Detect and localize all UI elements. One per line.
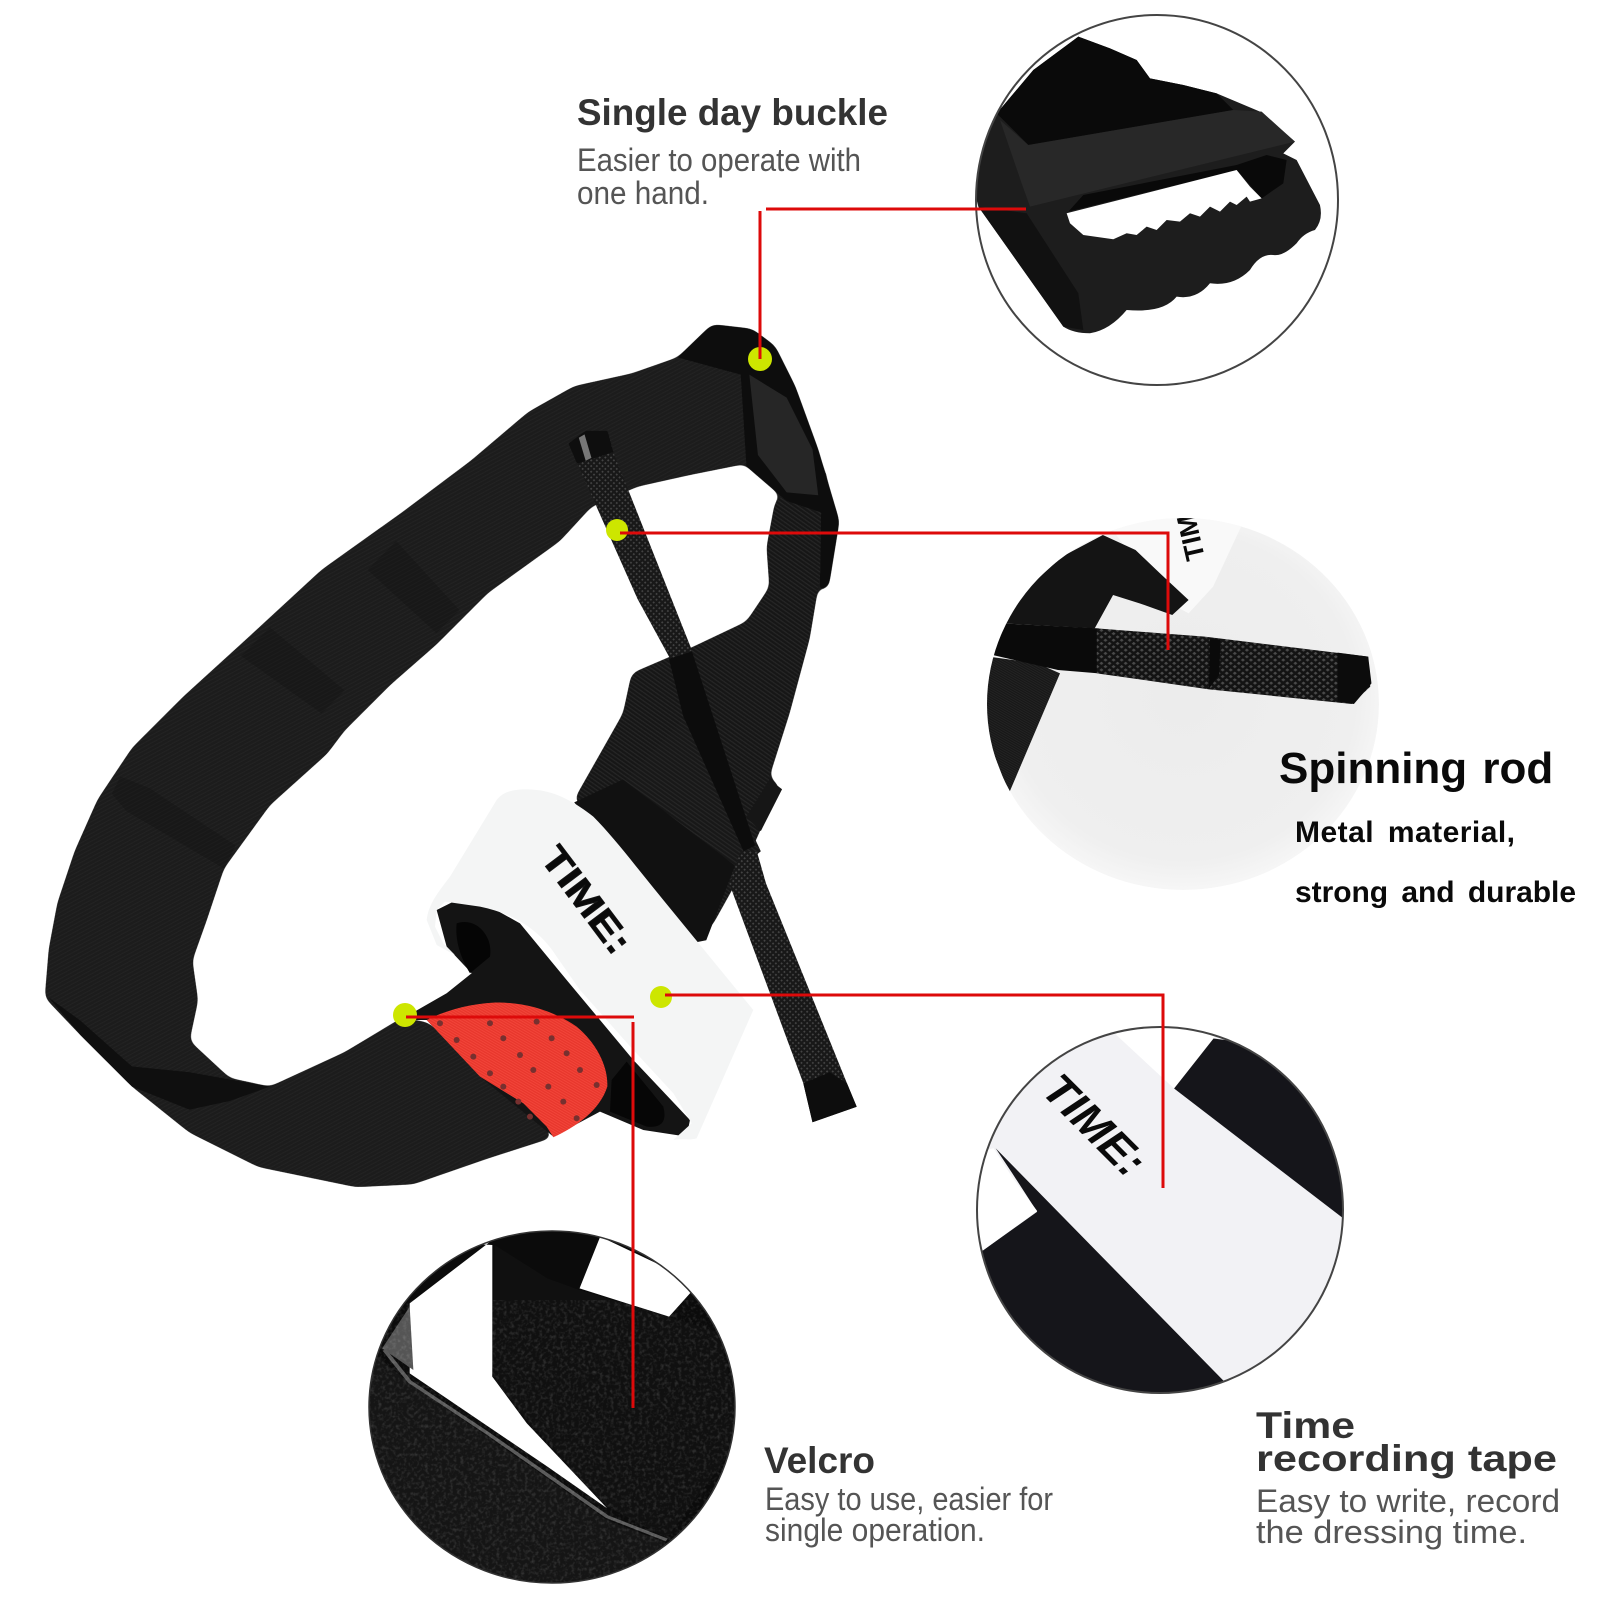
leader line: buckle horizontal <box>766 208 1026 210</box>
rod lower knurled <box>729 851 857 1122</box>
detail circle: velcro <box>370 1232 734 1582</box>
white top corner <box>1116 1028 1216 1088</box>
lower hollow of tape <box>610 1062 664 1127</box>
rod tip <box>1338 653 1371 704</box>
description: Easy to use, easier for <box>765 1481 1053 1517</box>
white gap left <box>396 1240 607 1508</box>
windlass rod <box>568 431 857 1122</box>
product photo: tourniquet <box>45 324 857 1187</box>
buckle webbing <box>749 375 818 495</box>
tape print: TIME: <box>1165 485 1211 563</box>
marker dot: buckle <box>748 347 772 371</box>
red patch dots <box>437 1019 600 1121</box>
title: Velcro <box>764 1440 875 1481</box>
back strap <box>574 472 827 943</box>
buckle <box>678 324 839 592</box>
photo details <box>980 517 1371 793</box>
heading: velcro <box>764 1440 1053 1548</box>
lower strap <box>980 657 1060 793</box>
heading: time recording tape: recording tape <box>1256 1438 1557 1479</box>
rod upper knurled <box>568 431 692 662</box>
leader line: tape <box>665 995 1163 1188</box>
heading: time recording tape: the dressing time. <box>1256 1514 1527 1550</box>
photo details <box>978 1028 1342 1392</box>
inner shadow <box>1068 155 1287 212</box>
leader line: velcro vertical <box>632 1022 634 1408</box>
rod tip highlight <box>579 434 591 461</box>
top webbing <box>997 37 1233 145</box>
marker dot: rod <box>606 519 628 541</box>
tape assembly <box>400 789 753 1140</box>
dark bottom strap <box>967 1148 1224 1400</box>
title: Spinning rod <box>1279 744 1553 793</box>
heading: time recording tape <box>1256 1405 1560 1550</box>
heading: spinning rod: strong and durable <box>1295 876 1576 909</box>
hollow <box>456 922 490 973</box>
grey sliver <box>382 1307 413 1370</box>
heading: single day buckle: one hand. <box>577 175 709 211</box>
circle outline: buckle <box>976 15 1338 385</box>
red hook patch <box>427 1003 607 1137</box>
marker dot: velcro <box>393 1003 417 1027</box>
description: Metal material, <box>1295 816 1515 849</box>
buckle slot <box>1067 170 1262 239</box>
crossbar <box>1000 110 1295 207</box>
velcro edge <box>49 998 270 1110</box>
velcro section <box>574 779 735 943</box>
white time tape <box>427 789 753 1140</box>
rod end <box>803 1072 857 1122</box>
main strap <box>45 357 758 1187</box>
leader line: velcro horizontal <box>406 1016 634 1018</box>
soft strap silhouette <box>45 324 839 1187</box>
rod knurl <box>1097 628 1370 704</box>
description: Easier to operate with <box>577 142 861 178</box>
velcro background <box>372 1232 734 1544</box>
photo details <box>370 1238 690 1582</box>
center flap <box>623 719 761 868</box>
background gap <box>978 1148 1038 1250</box>
circle outline: time tape <box>977 1027 1343 1393</box>
description: Easy to write, record <box>1256 1483 1560 1519</box>
rod slit section <box>669 651 755 851</box>
tape background <box>977 1027 1343 1393</box>
fabric edge <box>384 1350 667 1540</box>
lower velcro <box>370 1357 666 1582</box>
leader line: rod <box>620 533 1168 650</box>
leader line: buckle vertical <box>758 211 762 359</box>
tape print: TIME: TIME: <box>533 838 640 962</box>
rod gloss <box>993 623 1099 673</box>
detail circle: spinning rod <box>980 485 1379 890</box>
circle outline: velcro <box>369 1231 735 1583</box>
strap end under tape <box>400 900 690 1137</box>
white gap right <box>580 1237 699 1317</box>
rod tip <box>568 431 613 464</box>
dark top strap <box>1174 1038 1342 1218</box>
heading: velcro: single operation. <box>765 1512 985 1548</box>
marker dot: tape <box>650 986 672 1008</box>
velcro top <box>1001 535 1189 628</box>
circle print: TIME: TIME: <box>1033 1064 1155 1187</box>
title: Time <box>1256 1405 1355 1446</box>
white tape <box>1119 525 1238 613</box>
upper velcro <box>492 1368 496 1382</box>
velcro noise <box>369 1300 735 1583</box>
strap body <box>45 324 857 1187</box>
detail circle: time tape <box>982 1034 1342 1392</box>
foam background <box>987 518 1379 890</box>
left side shade <box>978 207 1083 330</box>
heading: single day buckle <box>577 92 888 211</box>
rod groove <box>1209 638 1220 688</box>
buckle body <box>970 37 1321 333</box>
detail circle: buckle <box>970 37 1321 333</box>
strap shadow folds <box>112 541 459 868</box>
heading: spinning rod <box>1279 744 1576 909</box>
title: Single day buckle <box>577 92 888 133</box>
side tab <box>746 779 782 831</box>
